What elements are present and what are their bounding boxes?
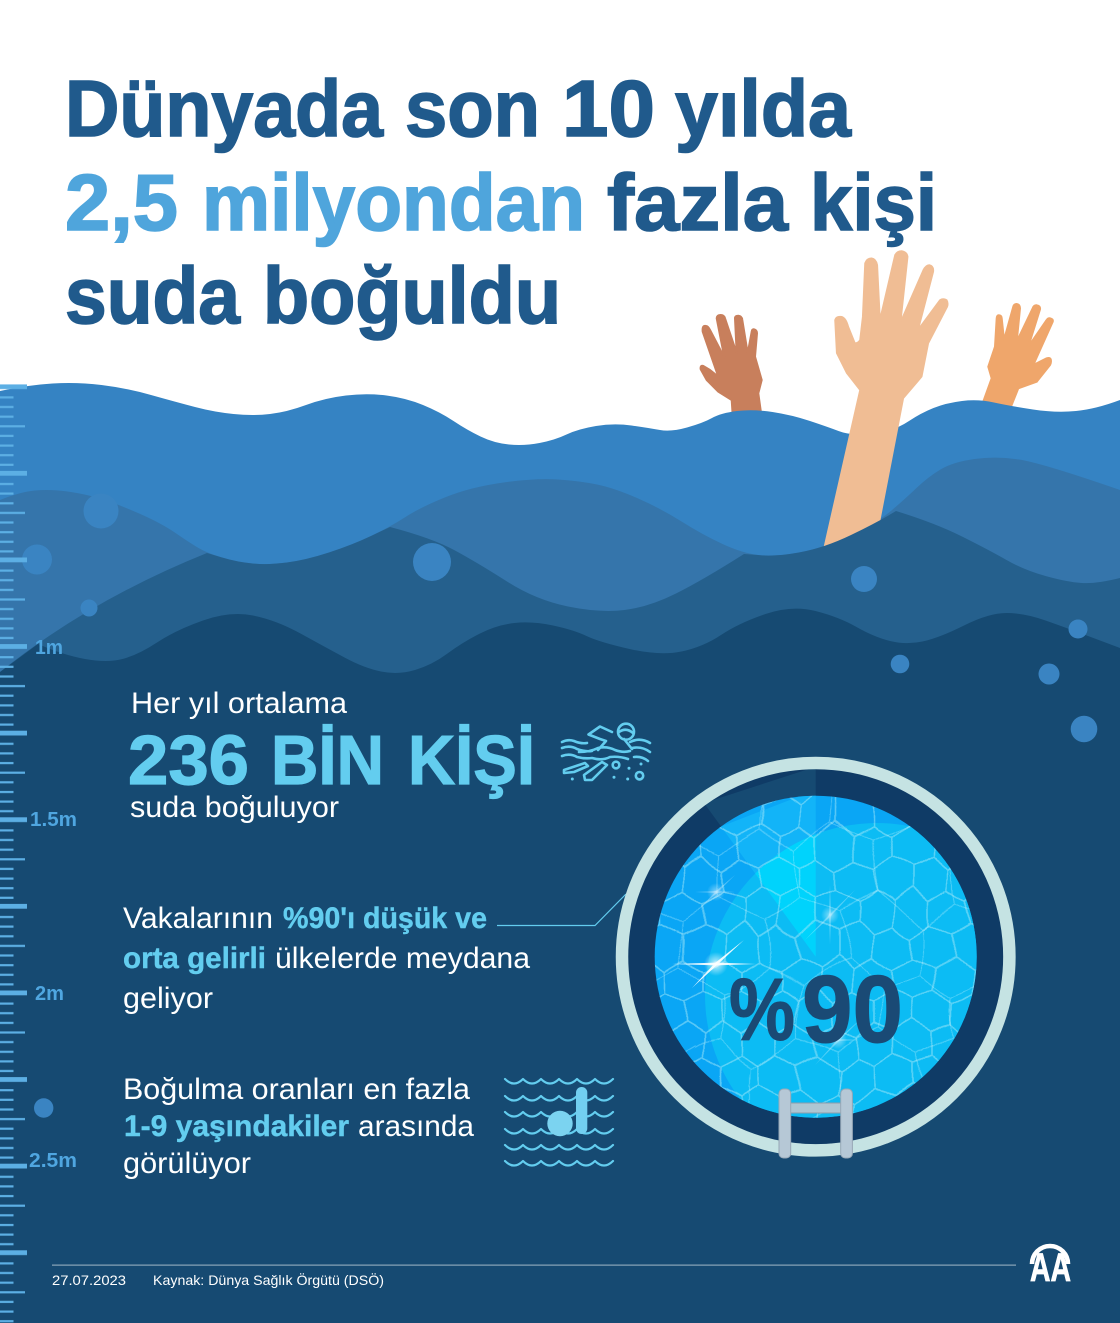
icon: left brown hand — [701, 315, 762, 420]
title: fazla — [607, 158, 789, 247]
title: 10 — [562, 64, 655, 153]
title: 2,5 — [65, 158, 178, 247]
front wave — [0, 383, 1120, 1323]
percentage: % — [729, 960, 795, 1059]
text: ninety percent of cases — [123, 902, 530, 1015]
title — [65, 64, 937, 340]
percentage — [729, 956, 903, 1063]
icon: right orange hand — [981, 304, 1053, 414]
depth labels: 1m — [35, 637, 63, 659]
second wave — [0, 458, 1120, 1323]
pool water — [655, 796, 977, 1118]
water slice and lighter area — [705, 796, 977, 1118]
pool ladder — [779, 1089, 852, 1158]
text: ages 1-9: 1-9 yaşındakiler — [124, 1110, 349, 1143]
depth ruler — [0, 384, 30, 1323]
leader line to pool — [497, 894, 626, 926]
text: ninety percent of cases: geliyor — [123, 982, 213, 1015]
stat: 236 bin kişi: BİN — [271, 721, 384, 799]
footer line — [52, 1265, 1016, 1266]
icon: swimmer — [562, 724, 650, 780]
text: ninety percent of cases: ülkelerde meydana — [275, 942, 530, 975]
title: kişi — [810, 158, 937, 247]
sparkles — [672, 875, 862, 1065]
title: son — [405, 64, 540, 153]
AA logo: AA — [1030, 1246, 1071, 1290]
depth labels: 2m — [35, 983, 64, 1005]
depth labels: 1.5m — [30, 809, 77, 831]
text: ninety percent of cases: %90'ı düşük ve — [283, 902, 487, 935]
text: ages 1-9 — [123, 1073, 474, 1180]
pool: ninety percent chart — [622, 763, 1049, 1167]
stat: 236 bin kişi: Her yıl ortalama — [131, 687, 347, 720]
caustic cells — [654, 796, 976, 1118]
title: Dünyada — [65, 64, 383, 153]
pool dark rim — [626, 767, 1006, 1147]
title: boğuldu — [263, 251, 561, 340]
text: ninety percent of cases: orta gelirli — [123, 942, 266, 975]
footer source: Kaynak: Dünya Sağlık Örgütü (DSÖ) — [153, 1271, 384, 1288]
bright ten percent slice — [756, 834, 816, 956]
icon: child in waves — [505, 1079, 613, 1166]
deep water wave — [0, 609, 1120, 1323]
depth labels: 2.5m — [29, 1150, 77, 1172]
title: yılda — [675, 64, 851, 153]
percentage: 90 — [802, 956, 903, 1063]
title: suda — [65, 251, 240, 340]
pool outer ring — [622, 763, 1009, 1150]
text: ages 1-9: arasında — [358, 1110, 474, 1143]
third wave — [0, 511, 1120, 1323]
icon: center raised arm — [818, 251, 948, 575]
stat: 236 bin kişi: KİŞİ — [408, 721, 535, 799]
title: milyondan — [202, 158, 585, 247]
depth labels — [29, 637, 77, 1172]
stat: 236 bin kişi: suda boğuluyor — [130, 791, 339, 824]
text: ages 1-9: görülüyor — [123, 1147, 251, 1180]
text: ages 1-9: Boğulma oranları en fazla — [123, 1073, 470, 1106]
stat: 236 bin kişi: 236 — [128, 721, 249, 799]
footer date: 27.07.2023 — [52, 1272, 126, 1288]
ten percent rim slice — [704, 767, 816, 957]
text: ninety percent of cases: Vakalarının — [123, 902, 273, 935]
stat: 236 bin kişi — [128, 687, 535, 824]
air bubbles — [22, 494, 1097, 1118]
